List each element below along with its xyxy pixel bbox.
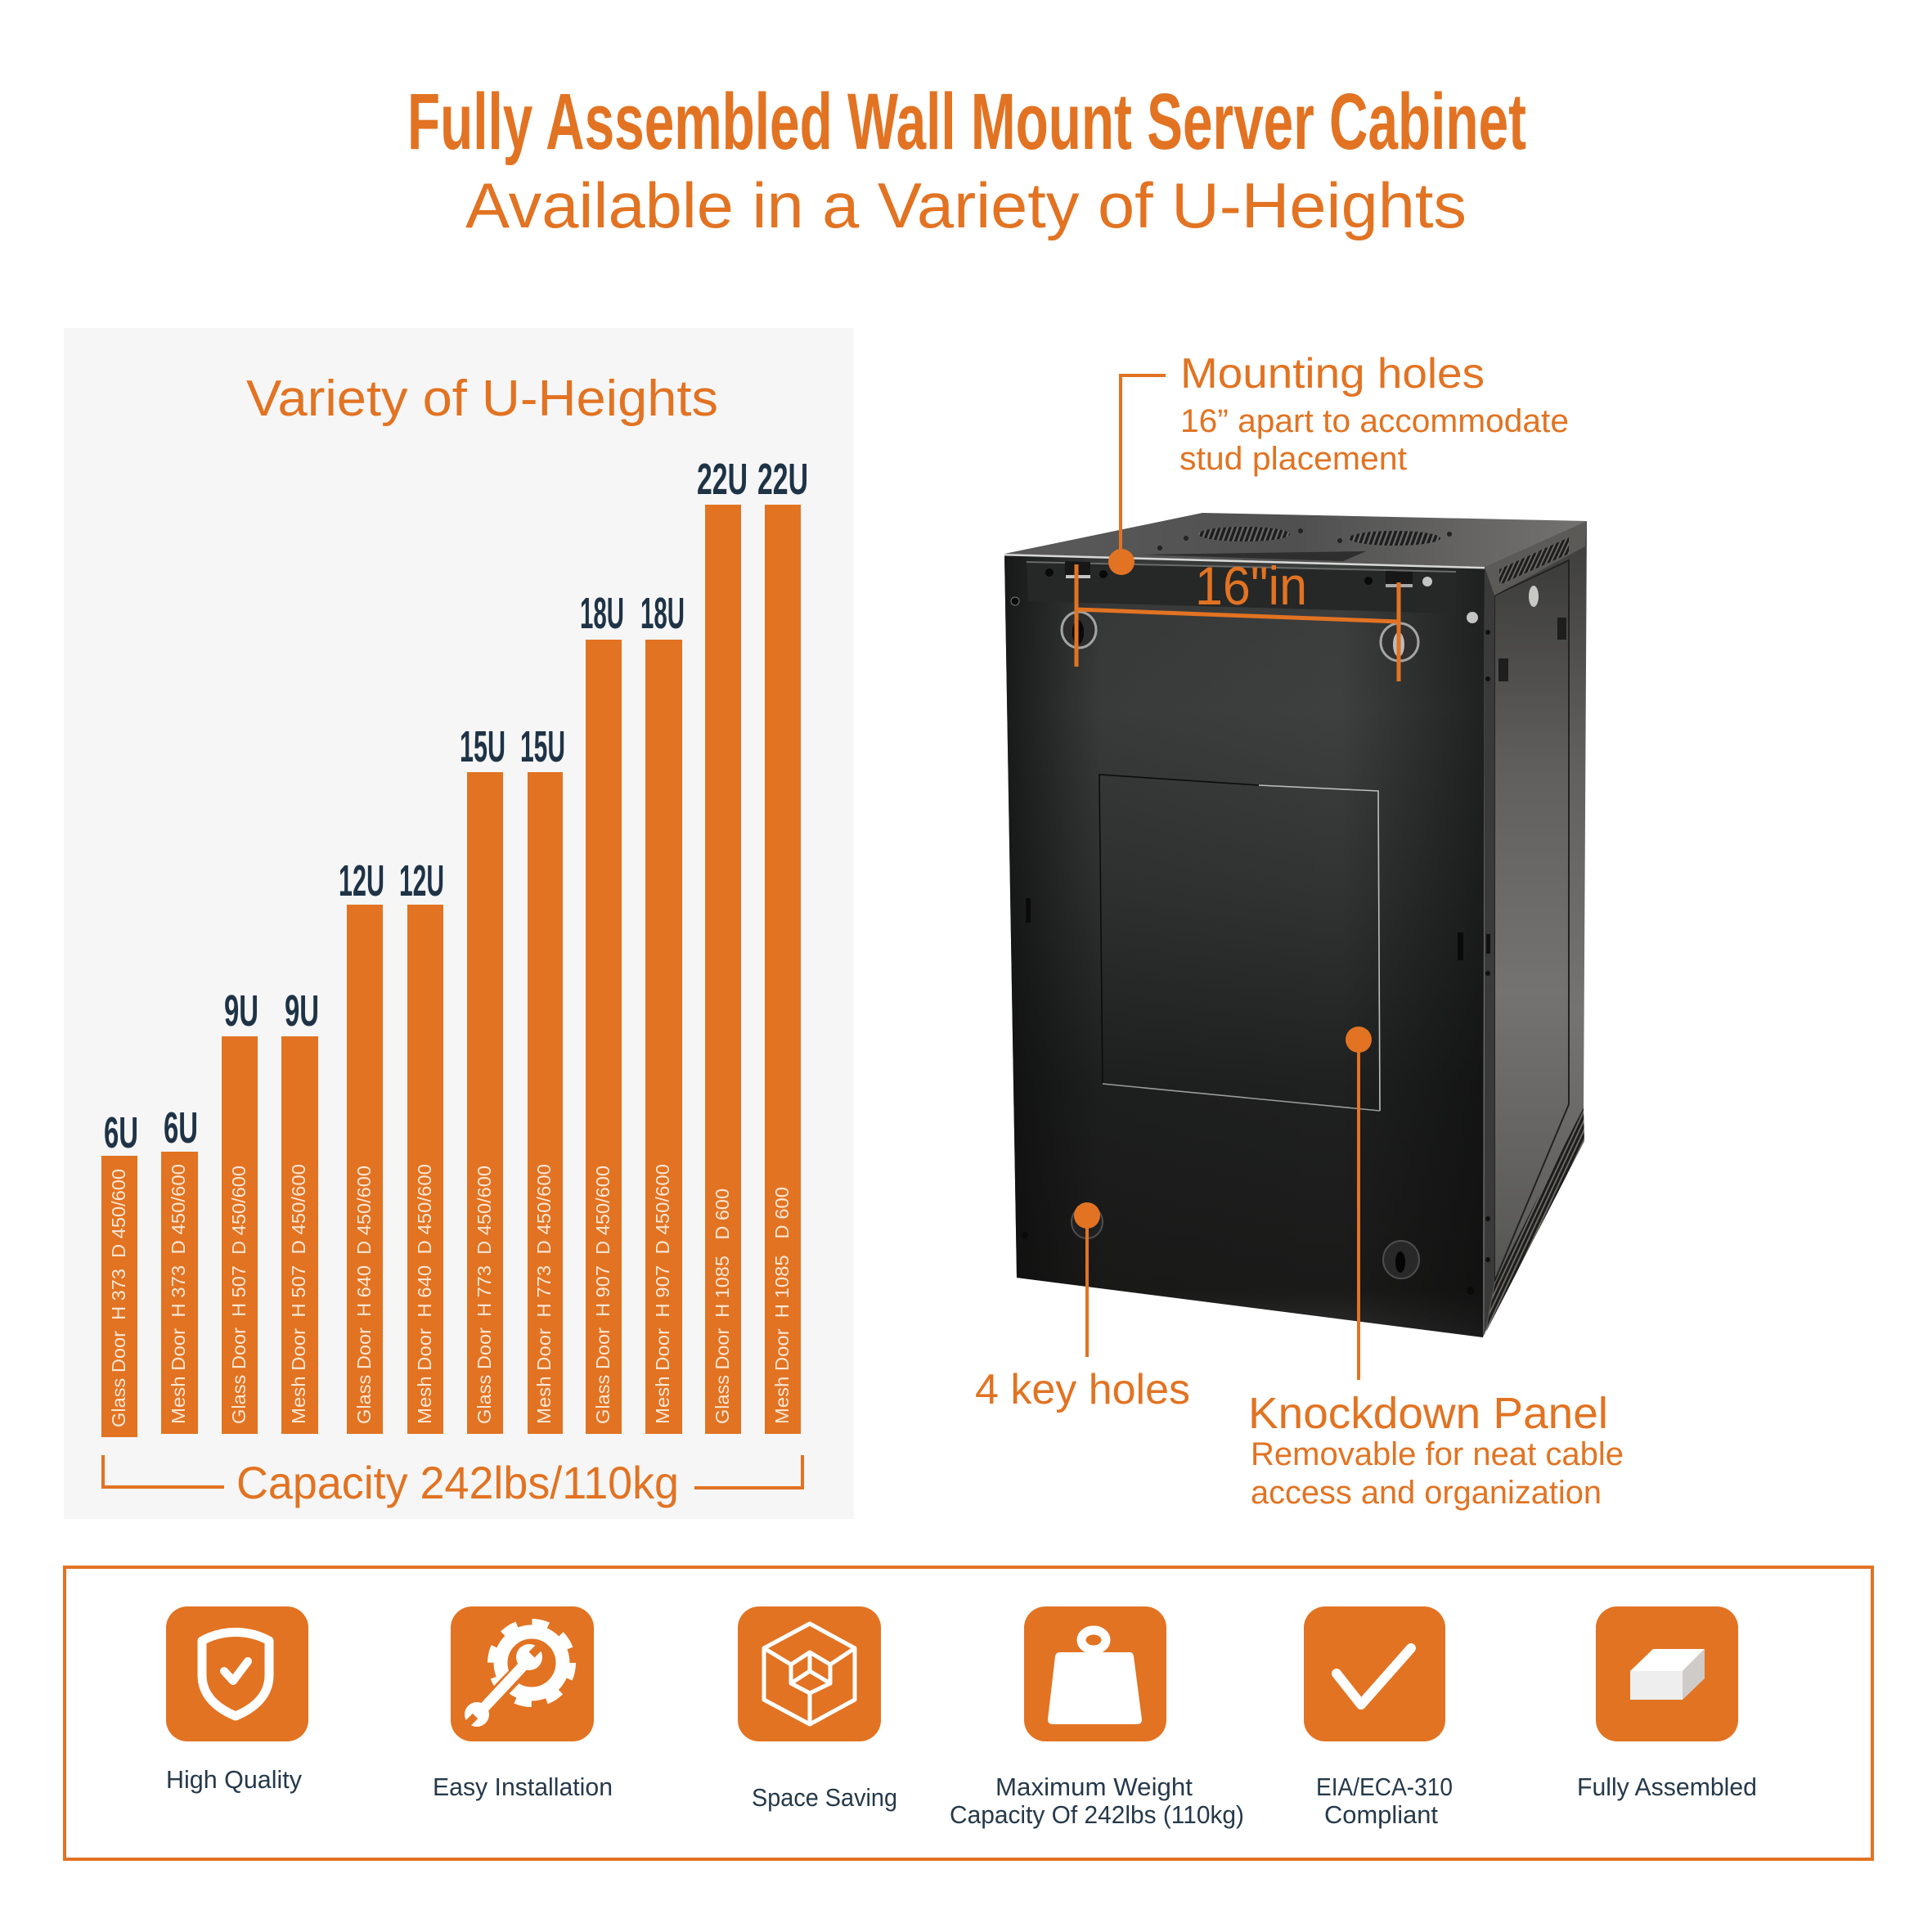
cabinet side face [1483,521,1587,1337]
bar 15U mesh door: Mesh Door H 773 D 450/600 [533,1164,555,1424]
bar 12U mesh door [399,856,444,1434]
icon: cube [764,1624,855,1724]
callout: 4 key holes [975,1202,1190,1413]
icon: gear and wrench [465,1623,572,1727]
16 inch measurement [1076,555,1399,681]
bar 22U mesh door: Mesh Door H 1085 D 600 [771,1187,793,1424]
feature: space saving [738,1606,897,1812]
bar 6U glass door [101,1108,138,1437]
mounting holes description: stud placement [1179,441,1407,477]
feature: high quality [166,1606,308,1794]
bar 9U mesh door: 9U [285,986,319,1036]
bar 18U mesh door: 18U [640,589,685,638]
small slots on front [1022,898,1475,1295]
panel: features [65,1567,1872,1859]
feature: space saving: Space Saving [752,1783,897,1812]
cabinet front face [1004,554,1485,1337]
mounting holes description [1179,403,1569,477]
callout: mounting holes [1108,350,1569,575]
knockdown panel outline [1099,775,1380,1111]
feature: maximum weight [950,1606,1244,1829]
icon: block [1630,1649,1705,1700]
bar 18U glass door [580,589,624,1434]
bar 12U mesh door: 12U [399,856,444,905]
callout: 4 key holes: 4 key holes [975,1366,1190,1413]
bar 9U glass door: Glass Door H 507 D 450/600 [228,1166,249,1424]
bar 12U mesh door: Mesh Door H 640 D 450/600 [414,1164,435,1424]
capacity label: Capacity 242lbs/110kg [236,1457,679,1508]
mounting holes heading: Mounting holes [1180,350,1485,398]
bar 15U mesh door: 15U [520,722,565,771]
bar 18U mesh door: Mesh Door H 907 D 450/600 [652,1164,673,1424]
knockdown panel description: access and organization [1251,1475,1602,1511]
bar 15U glass door [460,722,505,1434]
bar 18U mesh door [640,589,685,1434]
panel heading: Variety of U-Heights [246,371,718,427]
feature: EIA/ECA-310 compliant: Compliant [1324,1800,1438,1829]
bar 22U glass door: 22U [697,455,748,504]
bar 6U mesh door: 6U [164,1103,198,1152]
feature: maximum weight: Capacity Of 242lbs (110kg) [950,1800,1244,1829]
icon: shield [202,1633,269,1716]
key hole top left [1062,612,1096,648]
cabinet top face [1004,513,1587,567]
knockdown panel heading: Knockdown Panel [1248,1389,1608,1438]
feature: easy installation: Easy Installation [433,1772,613,1801]
bar 9U mesh door: Mesh Door H 507 D 450/600 [288,1164,309,1424]
capacity bracket [103,1455,802,1488]
bar 6U mesh door: Mesh Door H 373 D 450/600 [168,1164,189,1424]
key hole bottom right [1383,1241,1419,1278]
panel: variety of U-heights [64,328,854,1519]
callout: knockdown panel [1248,1027,1624,1511]
bar 12U glass door: 12U [339,856,384,905]
icon: check mark [1337,1648,1411,1705]
bar 12U glass door: Glass Door H 640 D 450/600 [353,1166,375,1424]
key hole top right [1381,623,1418,661]
bar 15U mesh door [520,722,565,1434]
16 inch measurement: 16"in [1195,555,1307,616]
feature: EIA/ECA-310 compliant: EIA/ECA-310 [1316,1772,1453,1801]
mounting rail [1027,561,1456,613]
bar 9U mesh door [281,986,319,1434]
bar 22U mesh door [757,455,808,1434]
knockdown panel description: Removable for neat cable [1251,1436,1624,1472]
top fan grills [1157,527,1452,550]
feature: fully assembled [1577,1606,1757,1801]
bar 18U glass door: Glass Door H 907 D 450/600 [592,1166,613,1424]
feature: fully assembled: Fully Assembled [1577,1772,1757,1801]
bar 6U glass door: Glass Door H 373 D 450/600 [108,1169,129,1427]
knockdown panel description [1251,1436,1624,1511]
icon: weight [1048,1630,1142,1724]
bar 22U glass door: Glass Door H 1085 D 600 [712,1188,733,1424]
subtitle: Available in a Variety of U-Heights [465,169,1467,241]
feature: maximum weight: Maximum Weight [995,1772,1193,1801]
mounting holes description: 16” apart to accommodate [1180,403,1569,439]
bar 18U glass door: 18U [580,589,624,638]
cabinet photo [1004,513,1587,1337]
bar 9U glass door [222,986,258,1434]
feature: EIA/ECA-310 compliant [1304,1606,1453,1829]
key hole bottom left [1072,1206,1103,1238]
bar 15U glass door: Glass Door H 773 D 450/600 [474,1166,495,1424]
bar 12U glass door [339,856,384,1434]
bar 15U glass door: 15U [460,722,505,771]
bar 6U glass door: 6U [104,1108,138,1157]
bar 22U glass door [697,455,748,1434]
bar 6U mesh door [161,1103,198,1434]
feature: high quality: High Quality [166,1765,302,1794]
feature: easy installation [433,1606,613,1801]
bar 9U glass door: 9U [224,986,258,1036]
bar 22U mesh door: 22U [757,455,808,504]
